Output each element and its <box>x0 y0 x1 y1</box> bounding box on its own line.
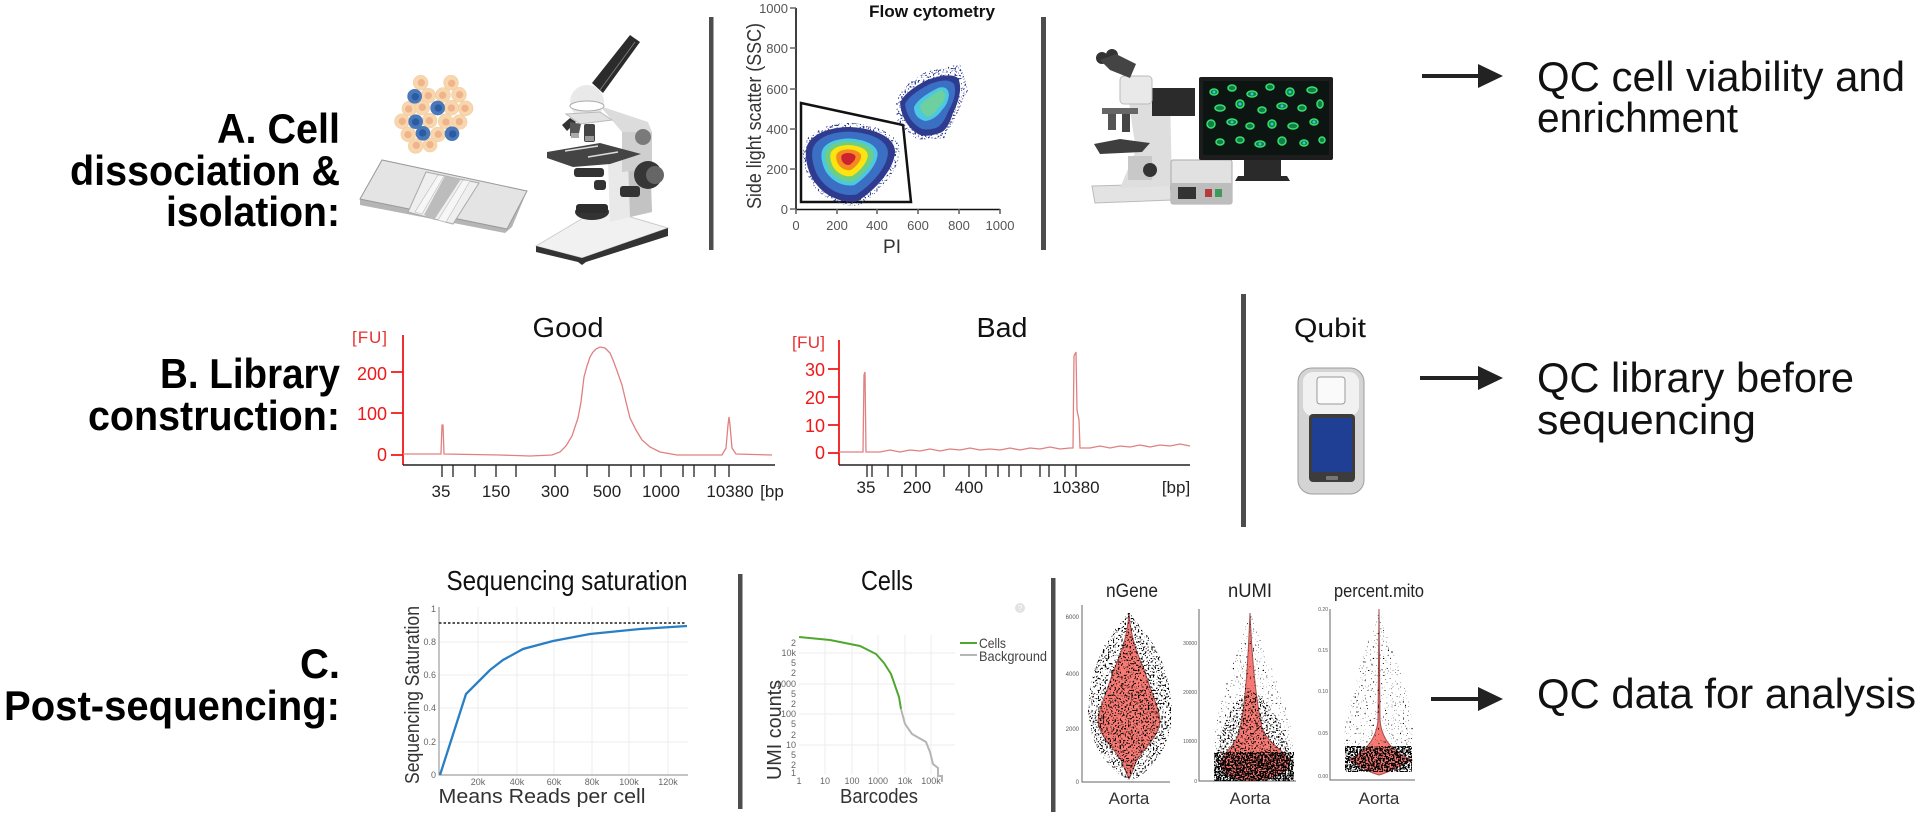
axis titles: Means Reads per cell <box>438 786 646 808</box>
row A heading <box>70 105 340 235</box>
scatter points <box>1214 612 1294 781</box>
chart: barcode rank plot <box>764 565 1047 808</box>
axis: 0 <box>1194 779 1197 785</box>
axis labels: PI <box>883 237 901 258</box>
x axis: [bp <box>760 482 784 501</box>
chart: flow cytometry: 200 <box>826 218 848 233</box>
divider <box>1051 578 1056 812</box>
chart: flow cytometry: 600 <box>766 82 788 97</box>
y axis <box>352 328 403 465</box>
axis: 30000 <box>1183 641 1197 647</box>
grid <box>439 607 688 775</box>
row A heading: A. Cell <box>217 105 340 152</box>
legend: Cells <box>979 635 1006 651</box>
x axis: 300 <box>541 482 569 501</box>
y axis: 30 <box>805 360 825 380</box>
chart: flow cytometry: 600 <box>907 218 929 233</box>
tick labels: 1000 <box>776 679 796 689</box>
y axis: 10 <box>805 416 825 436</box>
axis: 0.15 <box>1318 648 1328 654</box>
icon: cell cluster <box>395 75 473 153</box>
axis: 2000 <box>1066 727 1080 733</box>
x axis: 10380 <box>1052 478 1100 497</box>
chart title: Sequencing saturation <box>446 565 688 596</box>
axis: 6000 <box>1066 615 1080 621</box>
tick labels: 0.4 <box>423 703 436 713</box>
controller box <box>1171 160 1232 204</box>
icon: fluorescence microscope with monitor <box>1092 49 1333 204</box>
axis: 0.10 <box>1318 689 1328 695</box>
tick labels: 100 <box>781 709 796 719</box>
legend: Background <box>979 648 1047 664</box>
axis <box>1318 607 1415 808</box>
x axis: 200 <box>903 478 931 497</box>
axis titles: Sequencing Saturation <box>402 606 424 784</box>
axis: Aorta <box>1109 789 1150 808</box>
arrow <box>1431 687 1503 711</box>
violin <box>1349 609 1412 775</box>
axis: 0.00 <box>1318 774 1328 780</box>
population: live cells <box>803 123 900 206</box>
row B heading <box>88 350 341 439</box>
background curve <box>901 709 942 782</box>
axis labels <box>744 23 901 258</box>
tick labels: 2 <box>791 638 796 648</box>
chart title: percent.mito <box>1334 581 1424 601</box>
row C heading: C. <box>300 640 340 687</box>
chart: good library <box>352 312 784 501</box>
violin <box>1220 613 1290 781</box>
x axis: 150 <box>482 482 510 501</box>
divider <box>1241 294 1246 527</box>
chart title: Cells <box>861 565 913 596</box>
tick labels: 0.8 <box>423 637 436 647</box>
tick labels: 60k <box>547 777 562 787</box>
x axis: 35 <box>857 478 875 497</box>
x axis: 400 <box>955 478 983 497</box>
callout: QC cell viability <box>1537 53 1905 141</box>
y axis: 20 <box>805 388 825 408</box>
violin <box>1098 613 1160 779</box>
chart title: Bad <box>976 312 1028 343</box>
row B heading: construction: <box>88 392 340 439</box>
chart: nUMI violin <box>1183 581 1296 808</box>
axes <box>439 607 688 775</box>
microscope body <box>1092 49 1195 203</box>
tick labels: 100k <box>619 777 639 787</box>
axis titles: UMI counts <box>764 680 786 780</box>
axis: Aorta <box>1359 789 1400 808</box>
tick labels: 1 <box>796 776 802 786</box>
y axis: 0 <box>815 443 825 463</box>
x axis <box>839 465 1190 497</box>
chart: flow cytometry: 800 <box>766 41 788 56</box>
monitor <box>1199 77 1333 181</box>
scatter points <box>1088 612 1172 782</box>
tick labels: 1 <box>431 604 436 614</box>
chart title: Flow cytometry <box>869 2 996 21</box>
chart: flow cytometry <box>744 1 1014 258</box>
tick labels: 80k <box>585 777 600 787</box>
y axis <box>792 333 839 465</box>
tick labels: 2 <box>791 699 796 709</box>
tick labels: 0.2 <box>423 737 436 747</box>
callout: QC library <box>1537 354 1854 443</box>
chart title: nUMI <box>1228 581 1272 602</box>
tick labels: 100 <box>844 776 860 786</box>
x axis <box>403 465 784 501</box>
help icon <box>1015 603 1025 613</box>
device <box>1298 368 1364 494</box>
x axis: [bp] <box>1162 478 1190 497</box>
axis titles <box>764 680 918 808</box>
row A heading: isolation: <box>166 188 340 235</box>
chart: flow cytometry: 400 <box>766 122 788 137</box>
axis titles: Barcodes <box>840 786 918 808</box>
chart: bad library <box>792 312 1190 497</box>
tick labels: 2 <box>791 730 796 740</box>
tick labels: 1 <box>791 768 796 778</box>
callout: QC cell viability: QC cell viability and <box>1537 53 1905 100</box>
tick labels: 2 <box>791 668 796 678</box>
icon: glass slide <box>360 160 527 233</box>
y axis: [FU] <box>792 333 825 352</box>
chart: sequencing saturation <box>402 565 688 808</box>
chart: flow cytometry: 1000 <box>759 1 788 16</box>
tick labels: 10k <box>898 776 913 786</box>
row A heading: dissociation & <box>70 147 340 194</box>
axis: 20000 <box>1183 690 1197 696</box>
chart: flow cytometry: 400 <box>866 218 888 233</box>
axes and ticks <box>790 8 1000 214</box>
row C heading <box>4 640 340 729</box>
label: Qubit <box>1294 313 1367 343</box>
callout: QC library: QC library before <box>1537 354 1854 401</box>
y axis: 200 <box>357 364 387 384</box>
tick labels <box>423 604 678 787</box>
help icon: ? <box>1018 604 1023 613</box>
chart: percent.mito violin <box>1318 581 1424 808</box>
divider <box>1041 17 1046 250</box>
axis: 4000 <box>1066 672 1080 678</box>
tick labels: 10 <box>820 776 830 786</box>
row C heading: Post-sequencing: <box>4 682 340 729</box>
tick labels: 10k <box>781 648 796 658</box>
gate polygon <box>801 103 911 202</box>
axis titles <box>402 606 646 808</box>
row B heading: B. Library <box>160 350 341 397</box>
grid <box>799 635 955 774</box>
tick labels: 2 <box>791 760 796 770</box>
tick labels: 5 <box>791 719 796 729</box>
tick labels: 100k <box>921 776 941 786</box>
tick labels: 0.6 <box>423 670 436 680</box>
tick labels: 0 <box>431 770 436 780</box>
trace <box>403 347 772 456</box>
x axis: 500 <box>593 482 621 501</box>
chart: flow cytometry: 200 <box>766 162 788 177</box>
axis: 0 <box>1076 780 1080 786</box>
tick labels: 1000 <box>868 776 888 786</box>
arrow <box>1420 366 1503 390</box>
population: dead cells <box>895 64 968 140</box>
chart: flow cytometry: 800 <box>948 218 970 233</box>
axis: 0.05 <box>1318 731 1328 737</box>
tick labels: 5 <box>791 750 796 760</box>
chart: flow cytometry: 0 <box>792 218 800 233</box>
axis: Aorta <box>1230 789 1271 808</box>
trace <box>839 352 1190 452</box>
y axis: [FU] <box>352 328 387 347</box>
x axis: 35 <box>432 482 450 501</box>
axis labels: Side light scatter (SSC) <box>744 23 766 209</box>
arrow <box>1422 64 1503 88</box>
cells curve <box>799 637 901 709</box>
chart: flow cytometry: 0 <box>781 202 788 217</box>
icon: light microscope <box>536 35 668 265</box>
divider <box>709 17 714 250</box>
chart title: nGene <box>1106 581 1158 602</box>
scatter points <box>1344 609 1414 772</box>
callout: QC data: QC data for analysis <box>1537 670 1916 717</box>
legend <box>960 635 1047 664</box>
axis <box>1066 605 1170 808</box>
tick labels: 40k <box>510 777 525 787</box>
tick labels <box>776 638 941 786</box>
x axis: 1000 <box>642 482 680 501</box>
y axis: 0 <box>377 445 387 465</box>
x axis: 10380 <box>706 482 754 501</box>
tick labels: 120k <box>658 777 678 787</box>
tick labels: 20k <box>471 777 486 787</box>
callout: QC library: sequencing <box>1537 396 1756 443</box>
callout: QC cell viability: enrichment <box>1537 94 1738 141</box>
divider <box>738 574 742 809</box>
axis <box>1183 609 1296 808</box>
saturation curve <box>440 626 687 775</box>
chart: nGene violin <box>1066 581 1172 808</box>
axis: 0.20 <box>1318 607 1328 613</box>
target line <box>439 622 686 624</box>
tick labels: 5 <box>791 689 796 699</box>
y axis: 100 <box>357 404 387 424</box>
tick labels: 5 <box>791 658 796 668</box>
axis: 10000 <box>1183 739 1197 745</box>
chart title: Good <box>532 312 604 343</box>
chart: flow cytometry: 1000 <box>986 218 1014 233</box>
tick labels: 10 <box>786 740 796 750</box>
icon: Qubit fluorometer <box>1294 313 1367 494</box>
